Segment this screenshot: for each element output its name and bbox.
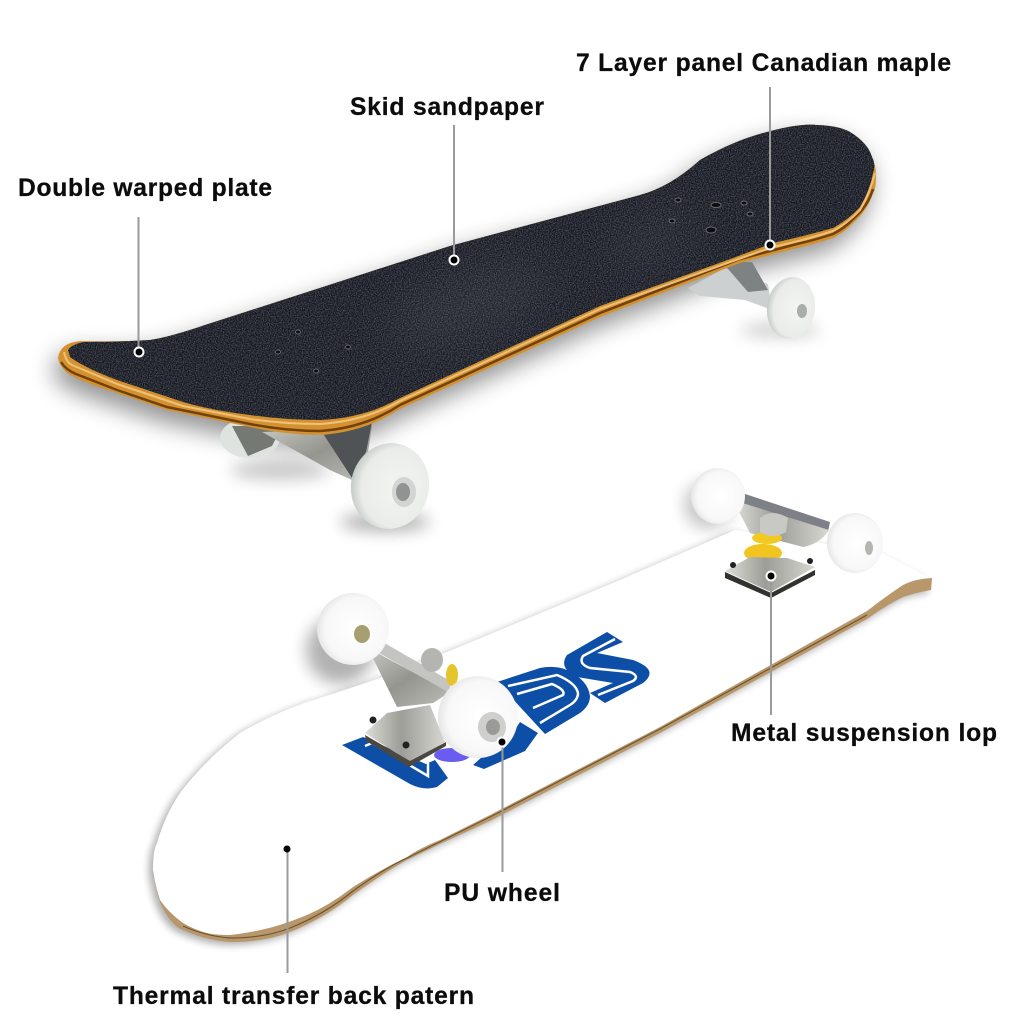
logo: blue lettering [342, 632, 650, 788]
bottom skateboard [149, 468, 932, 945]
grip tape: skid sandpaper [68, 125, 874, 420]
callout: thermal transfer back patern: Thermal transfer back patern [113, 983, 474, 1010]
white deck underside [153, 530, 930, 935]
bottom deck wood edge [153, 578, 932, 942]
front truck and wheels, top board [220, 418, 437, 536]
dark ply line on wood edge [183, 615, 867, 938]
callout: PU wheel: PU wheel [444, 880, 560, 907]
deck edge: 7 layer Canadian maple [58, 125, 876, 435]
deck shadow [149, 533, 928, 945]
callout: PU wheel [444, 736, 560, 907]
shadows under top board [53, 135, 872, 531]
purple graphic blotch [434, 748, 470, 762]
callout: skid sandpaper: Skid sandpaper [350, 94, 544, 121]
front truck, bottom board [317, 593, 518, 767]
dark ply line on edge [61, 189, 873, 431]
letter 3 [497, 667, 590, 734]
grip wear patches [375, 206, 703, 361]
callout: skid sandpaper [350, 94, 544, 266]
callout: metal suspension lop [731, 570, 997, 747]
rear truck and wheel, top board [688, 262, 819, 342]
callout: 7 layer panel Canadian maple [576, 50, 951, 250]
letter D fragment [473, 722, 538, 769]
top skateboard [53, 125, 876, 536]
callout: 7 layer panel Canadian maple: 7 Layer panel Canadian maple [576, 50, 951, 77]
wheel shadows, bottom board [306, 481, 732, 684]
letter S [564, 632, 650, 703]
callout: metal suspension lop: Metal suspension lop [731, 720, 997, 747]
letter V [342, 737, 448, 788]
callout: thermal transfer back patern [113, 846, 474, 1010]
pale ply line on edge [64, 173, 875, 424]
rear truck, bottom board [691, 468, 883, 598]
truck bolt holes [276, 198, 753, 373]
callout: double warped plate: Double warped plate [18, 175, 272, 202]
callout: double warped plate [18, 175, 272, 358]
